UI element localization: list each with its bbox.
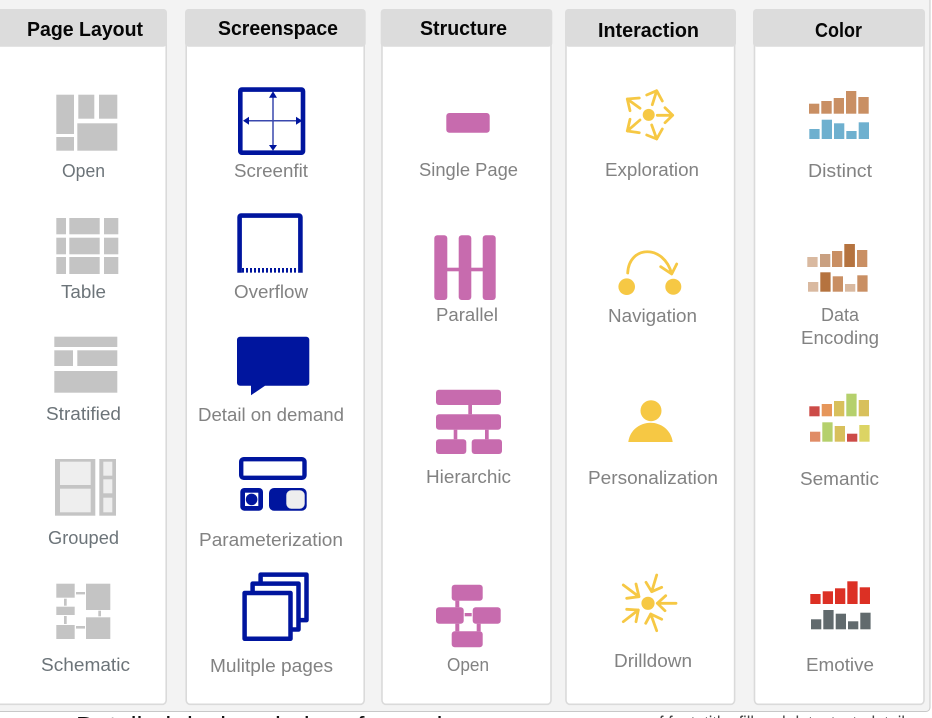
- heading: page layout: Page Layout: [27, 19, 143, 41]
- label: hierarchic: Hierarchic: [426, 467, 511, 487]
- label: drilldown: Drilldown: [614, 651, 692, 671]
- label: personalization: Personalization: [588, 468, 718, 488]
- icon: distinct bars: [809, 91, 869, 139]
- heading: structure: Structure: [420, 18, 507, 40]
- icon: data encoding bars: [807, 244, 868, 292]
- label: semantic: Semantic: [800, 469, 879, 489]
- label: single page: Single Page: [419, 160, 518, 180]
- icon: detail on demand: [237, 337, 309, 395]
- icon: navigation: [618, 252, 681, 295]
- label: data encoding: Data: [821, 305, 860, 325]
- label: exploration: Exploration: [605, 160, 699, 180]
- label: detail on demand: Detail on demand: [198, 405, 344, 425]
- panel: interaction: [565, 9, 736, 704]
- panel: page layout: [0, 9, 167, 704]
- icon: parameterization: [240, 459, 307, 511]
- icon: overflow: [240, 216, 300, 273]
- label: schematic: Schematic: [41, 655, 130, 675]
- icon: grouped layout: [55, 459, 116, 516]
- icon: stratified layout: [54, 337, 117, 393]
- panel: structure: [381, 9, 552, 704]
- icon: multiple pages: [245, 575, 306, 639]
- label: open: Open: [447, 655, 489, 675]
- icon: single page: [446, 113, 490, 133]
- label: parallel: Parallel: [436, 305, 498, 325]
- icon: personalization: [628, 400, 673, 442]
- label: distinct: Distinct: [808, 161, 872, 181]
- heading: color: Color: [815, 20, 862, 42]
- panel: color: [753, 9, 925, 704]
- label: table: Table: [61, 282, 106, 302]
- icon: schematic layout: [56, 584, 110, 639]
- label: multiple pages: Mulitple pages: [210, 656, 333, 676]
- label: data encoding: [801, 305, 879, 348]
- label: parameterization: Parameterization: [199, 530, 343, 550]
- icon: hierarchic: [436, 390, 502, 454]
- icon: parallel: [434, 235, 496, 300]
- panel: screenspace: [185, 9, 366, 704]
- label: stratified: Stratified: [46, 404, 121, 424]
- icon: emotive bars: [810, 581, 871, 629]
- icon: open layout: [56, 95, 117, 151]
- heading: interaction: Interaction: [598, 20, 699, 42]
- icon: open structure: [436, 585, 501, 647]
- label: emotive: Emotive: [806, 655, 874, 675]
- heading: screenspace: Screenspace: [218, 18, 338, 40]
- icon: exploration: [627, 91, 673, 139]
- label: open: Open: [62, 161, 105, 181]
- icon: screenfit: [240, 90, 303, 153]
- icon: table layout: [56, 218, 118, 274]
- label: navigation: Navigation: [608, 306, 697, 326]
- icon: semantic bars: [809, 394, 870, 442]
- label: screenfit: Screenfit: [234, 161, 308, 181]
- label: data encoding: Encoding: [801, 328, 879, 348]
- label: overflow: Overflow: [234, 282, 309, 302]
- icon: drilldown: [623, 575, 676, 631]
- label: grouped: Grouped: [48, 528, 119, 548]
- caption: cut off at the bottom edge: [76, 712, 905, 718]
